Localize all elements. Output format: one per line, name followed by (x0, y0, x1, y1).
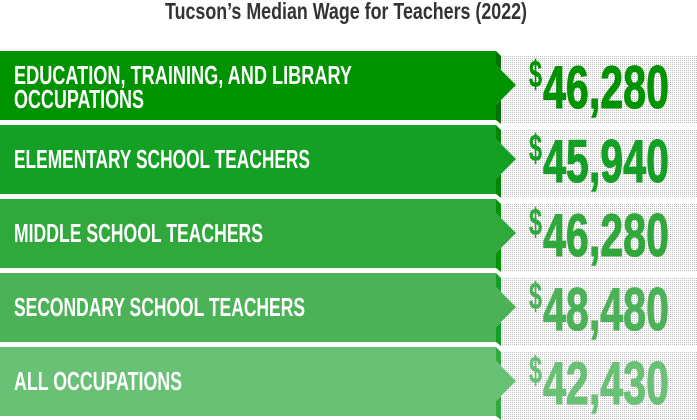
value: $ (529, 202, 542, 244)
dotted value panel (502, 55, 697, 124)
ribbon fold (496, 273, 501, 346)
arrow bar (0, 199, 516, 268)
ribbon fold (496, 51, 501, 124)
dotted value panel (502, 129, 697, 198)
label: SECONDARY SCHOOL TEACHERS (14, 292, 305, 322)
arrow bar (0, 273, 516, 342)
row: middle school teachers (0, 199, 697, 272)
value: $ (529, 54, 542, 96)
label: MIDDLE SCHOOL TEACHERS (14, 218, 263, 248)
ribbon fold (496, 199, 501, 272)
row: elementary school teachers (0, 125, 697, 198)
label: ELEMENTARY SCHOOL TEACHERS (14, 144, 310, 174)
value: $ (529, 350, 542, 392)
ribbon fold (496, 125, 501, 198)
value: $ (529, 276, 542, 318)
label: EDUCATION, TRAINING, AND LIBRARY (14, 60, 352, 90)
arrow bar (0, 125, 516, 194)
label (14, 60, 352, 114)
ribbon fold (496, 347, 501, 420)
value: $ (529, 128, 542, 170)
dotted value panel (502, 203, 697, 272)
row: education, training, and library occupations (0, 51, 697, 124)
label: OCCUPATIONS (14, 84, 144, 114)
arrow bar (0, 347, 516, 416)
label: ALL OCCUPATIONS (14, 366, 182, 396)
arrow bar (0, 51, 516, 120)
dotted value panel (502, 277, 697, 346)
row: secondary school teachers (0, 273, 697, 346)
row: all occupations (0, 347, 697, 420)
dotted value panel (502, 351, 697, 420)
